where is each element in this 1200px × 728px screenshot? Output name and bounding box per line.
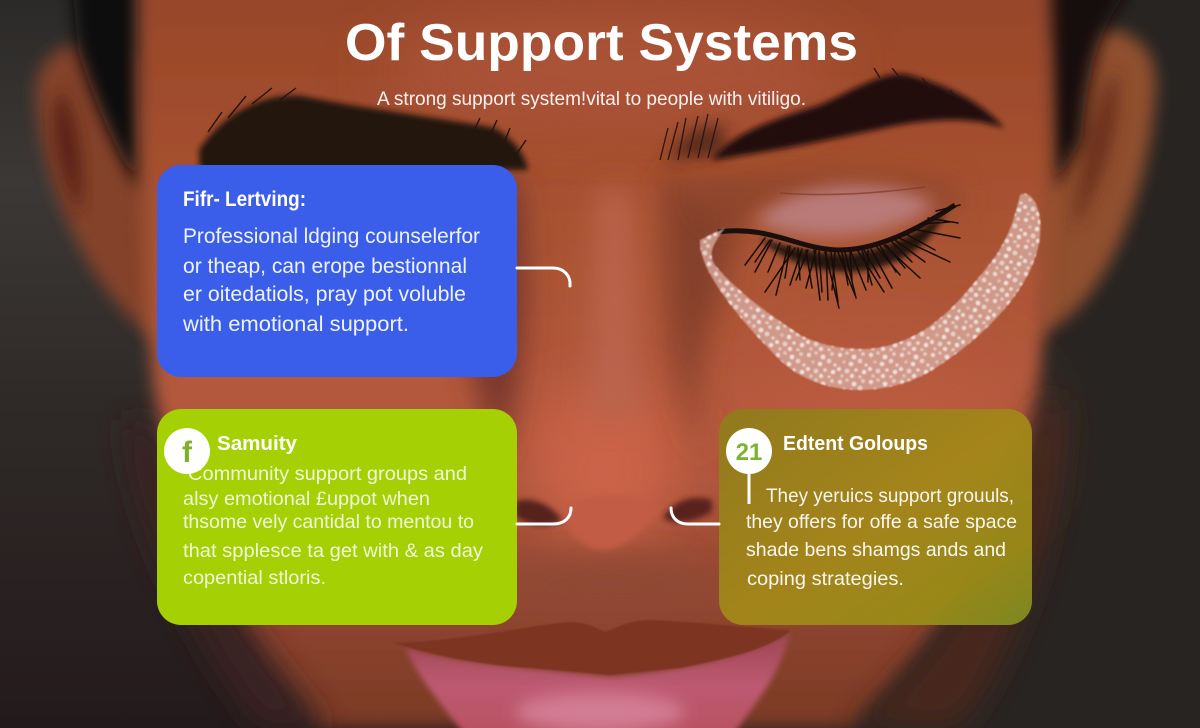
face shading: [125, 15, 1062, 728]
connector: olive panel: [671, 508, 719, 524]
left eyebrow: [199, 88, 528, 170]
panel body text: copential stloris.: [183, 567, 326, 589]
connector: green panel: [517, 508, 571, 524]
face shape: [138, 0, 1052, 728]
panel body text: with emotional support.: [182, 313, 409, 336]
panel body text: shade bens shamgs ands and: [746, 539, 1006, 561]
panel body text: alsy emotional £uppot when: [183, 488, 430, 510]
panel body text: or theap, can erope bestionnal: [183, 255, 467, 278]
lips: [394, 620, 791, 728]
panel body text: thsome vely cantidal to mentou to: [183, 511, 474, 533]
icon: f badge: [164, 428, 210, 474]
vitiligo patch: [700, 194, 1040, 390]
title: Of Support Systems: [345, 14, 858, 72]
panel heading: Edtent Goloups: [783, 433, 928, 455]
panel body text: er oitedatiols, pray pot voluble: [183, 283, 466, 306]
panel body text: that spplesce ta get with & as day: [183, 540, 483, 562]
right eyebrow: [660, 68, 1004, 160]
panel heading: Fifr- Lertving:: [183, 188, 306, 211]
panel body text: Professional ldging counselerfor: [183, 225, 480, 248]
panel heading: Samuity: [217, 433, 298, 455]
panel body text: [182, 225, 480, 336]
nose tip and nostrils: [515, 495, 712, 550]
panel: professional counseling: [157, 165, 517, 377]
icon: number badge: 21: [736, 439, 762, 466]
icon: f badge: f: [182, 436, 193, 469]
panel body text: They yeruics support grouuls,: [766, 485, 1014, 507]
panel body text: [183, 463, 483, 589]
panel: community: [157, 409, 517, 625]
panel body text: Community support groups and: [188, 463, 467, 485]
closed right eye: [690, 175, 960, 308]
panel: support groups: [719, 409, 1032, 625]
panel body text: they offers for offe a safe space: [746, 511, 1017, 533]
icon: number badge: [726, 428, 772, 504]
panel body text: coping strategies.: [747, 568, 904, 590]
panel body text: [746, 485, 1017, 590]
subtitle: A strong support system!vital to people with vitiligo.: [377, 88, 806, 110]
ears: [36, 29, 1156, 345]
eyelashes: [745, 205, 960, 308]
hair: [72, 0, 1135, 190]
connector: blue panel: [517, 268, 570, 286]
